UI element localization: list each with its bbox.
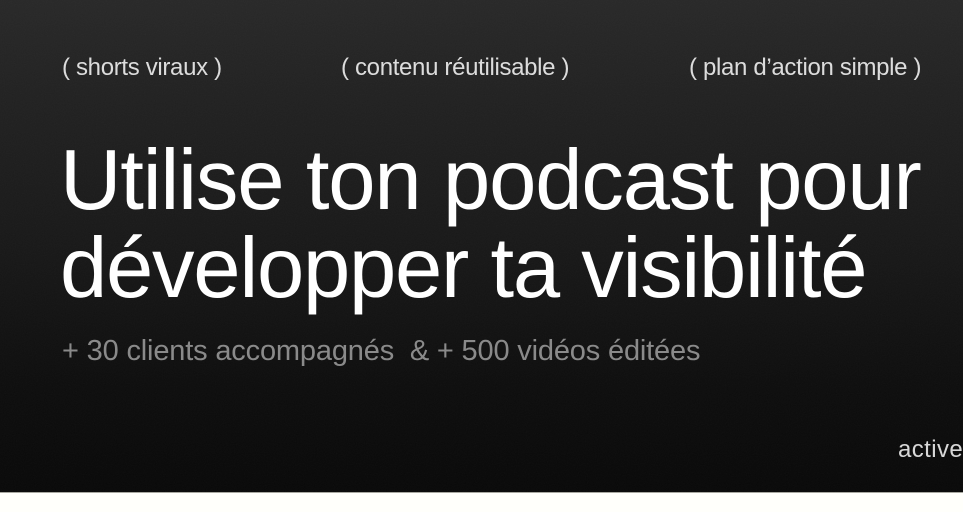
tag: plan d'action simple: ( plan d’action simple ) bbox=[689, 54, 921, 81]
heading line 2: développer ta visibilité bbox=[60, 221, 866, 316]
subheading: stats: + 30 clients accompagnés & + 500 vidéos éditées bbox=[62, 335, 700, 367]
tag: shorts viraux: ( shorts viraux ) bbox=[62, 54, 222, 81]
cropped label: active: active bbox=[898, 436, 963, 463]
tag: contenu réutilisable: ( contenu réutilisable ) bbox=[341, 54, 569, 81]
heading line 1: Utilise ton podcast pour bbox=[60, 133, 921, 228]
